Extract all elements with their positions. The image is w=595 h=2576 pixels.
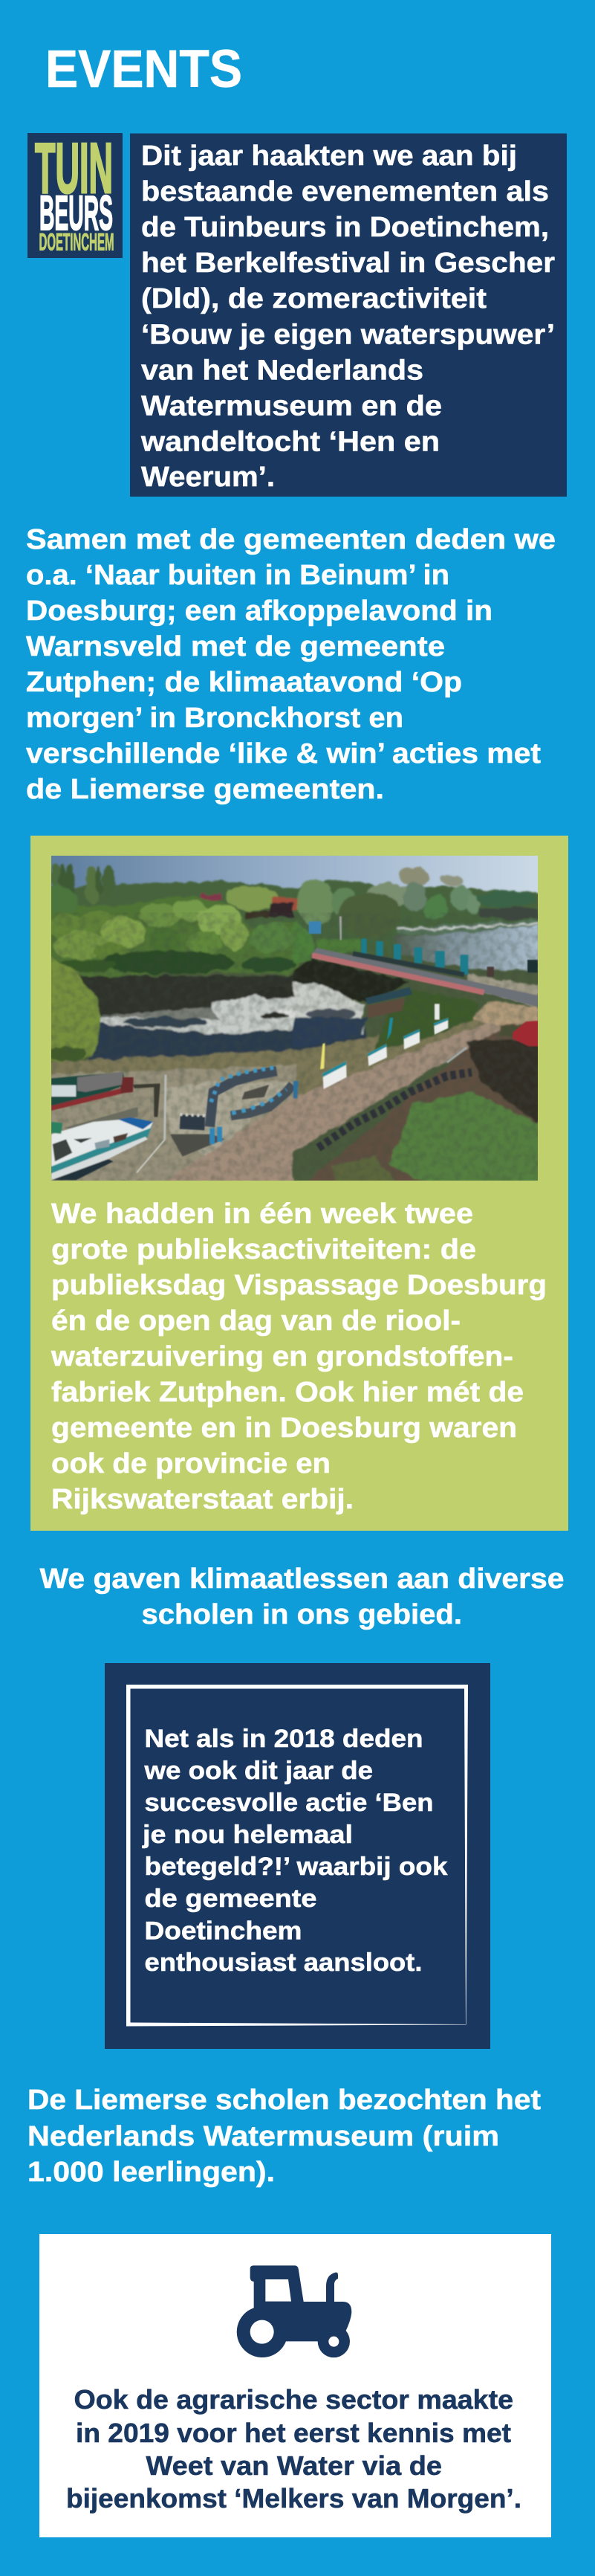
text block: Liemerse schools: De Liemerse scholen bezochten het [27, 2085, 541, 2116]
left lower trees [46, 954, 100, 1064]
main foliage [44, 888, 299, 977]
bank and quay [51, 1019, 486, 1096]
panel: Ben je nou helemaal betegeld [105, 1663, 490, 2049]
text block: climate lessons [40, 1563, 565, 1630]
far tree band and poplars [42, 879, 547, 955]
text: two public activities: We hadden in één week twee [51, 1198, 473, 1230]
panel: existing events: van het Nederlands [141, 355, 423, 387]
sharp details bottom left [51, 1068, 293, 1180]
text: two public activities: én de open dag van de riool- [51, 1305, 461, 1337]
water [76, 976, 348, 1058]
icon: tractor [237, 2265, 351, 2357]
lower bridge shoulder [293, 958, 410, 1002]
logo: Tuinbeurs Doetinchem [27, 129, 123, 258]
text block: municipalities [26, 524, 556, 805]
text block: Liemerse schools: Nederlands Watermuseum (ruim [27, 2121, 499, 2152]
panel: existing events [130, 134, 567, 497]
far right trees [297, 879, 334, 926]
panel: existing events: Weerum’. [141, 462, 275, 493]
sharp details top right [309, 917, 539, 1020]
title: EVENTS [45, 40, 242, 99]
text block: Liemerse schools: 1.000 leerlingen). [27, 2157, 275, 2188]
panel: existing events: het Berkelfestival in Gescher [141, 248, 555, 279]
text: agricultural sector: bijeenkomst ‘Melkers van Morgen’. [66, 2483, 521, 2514]
text: agricultural sector: in 2019 voor het eerst kennis met [76, 2418, 511, 2448]
panel: Ben je nou helemaal betegeld: Doetinchem [144, 1917, 302, 1945]
panel: agricultural sector [39, 2234, 551, 2537]
sharp details bottom right [293, 1018, 539, 1148]
text: two public activities: waterzuivering en grondstoffen- [51, 1341, 513, 1372]
text block: municipalities: verschillende ‘like & win’ acties met [26, 738, 541, 769]
panel: Ben je nou helemaal betegeld: betegeld?!’ waarbij ook [144, 1853, 448, 1881]
logo: Tuinbeurs Doetinchem: DOETINCHEM [39, 229, 114, 256]
panel: existing events: ‘Bouw je eigen waterspuwer’ [141, 320, 555, 351]
text: agricultural sector: Weet van Water via de [146, 2450, 442, 2481]
text block: municipalities: Zutphen; de klimaatavond ‘Op [26, 667, 462, 698]
people [180, 1122, 205, 1123]
logo: Tuinbeurs Doetinchem: TUIN [35, 129, 113, 208]
text block: climate lessons: scholen in ons gebied. [141, 1599, 462, 1630]
panel: Ben je nou helemaal betegeld: de gemeente [144, 1885, 316, 1913]
text: two public activities: gemeente en in Doesburg waren [51, 1413, 517, 1444]
photo: aerial view of the fish passage [42, 856, 547, 1188]
text block: climate lessons: We gaven klimaatlessen aan diverse [40, 1563, 565, 1595]
text: two public activities: fabriek Zutphen. Ook hier mét de [51, 1377, 524, 1408]
road and field [309, 1023, 538, 1181]
grain texture [51, 913, 538, 1181]
text: two public activities: grote publieksactiviteiten: de [51, 1234, 476, 1265]
text: BEURS [39, 185, 113, 240]
text: agricultural sector [66, 2384, 521, 2514]
panel: Ben je nou helemaal betegeld: enthousiast aansloot. [144, 1949, 422, 1977]
text block: municipalities: o.a. ‘Naar buiten in Beinum’ in [26, 560, 449, 591]
panel: existing events: de Tuinbeurs in Doetinchem, [141, 212, 549, 243]
text block: municipalities: Warnsveld met de gemeente [26, 631, 445, 662]
panel: Ben je nou helemaal betegeld: we ook dit jaar de [143, 1757, 373, 1785]
text block: municipalities: Samen met de gemeenten deden we [26, 524, 556, 555]
text: two public activities [51, 1198, 547, 1515]
panel: existing events: (Dld), de zomeractiviteit [141, 283, 487, 314]
text block: Liemerse schools [27, 2085, 541, 2188]
panel: existing events: Dit jaar haakten we aan bij [141, 141, 517, 172]
panel: existing events: bestaande evenementen als [141, 176, 549, 207]
panel: public activities [30, 836, 568, 1531]
text: two public activities: Rijkswaterstaat erbij. [51, 1484, 354, 1515]
foam [98, 995, 365, 1034]
panel: Ben je nou helemaal betegeld: succesvolle actie ‘Ben [144, 1789, 434, 1817]
text: two public activities: publieksdag Vispassage Doesburg [51, 1270, 547, 1301]
text block: municipalities: Doesburg; een afkoppelavond in [26, 595, 492, 627]
text block: municipalities: morgen’ in Bronckhorst en [26, 703, 403, 734]
river [393, 926, 539, 971]
panel: Ben je nou helemaal betegeld: je nou helemaal [142, 1821, 353, 1849]
text: agricultural sector: Ook de agrarische sector maakte [74, 2384, 513, 2415]
text block: municipalities: de Liemerse gemeenten. [26, 774, 384, 805]
panel: Ben je nou helemaal betegeld: Net als in 2018 deden [144, 1725, 423, 1753]
text: two public activities: ook de provincie en [51, 1448, 331, 1479]
panel: existing events: wandeltocht ‘Hen en [140, 427, 440, 458]
panel: existing events: Watermuseum en de [141, 391, 442, 422]
